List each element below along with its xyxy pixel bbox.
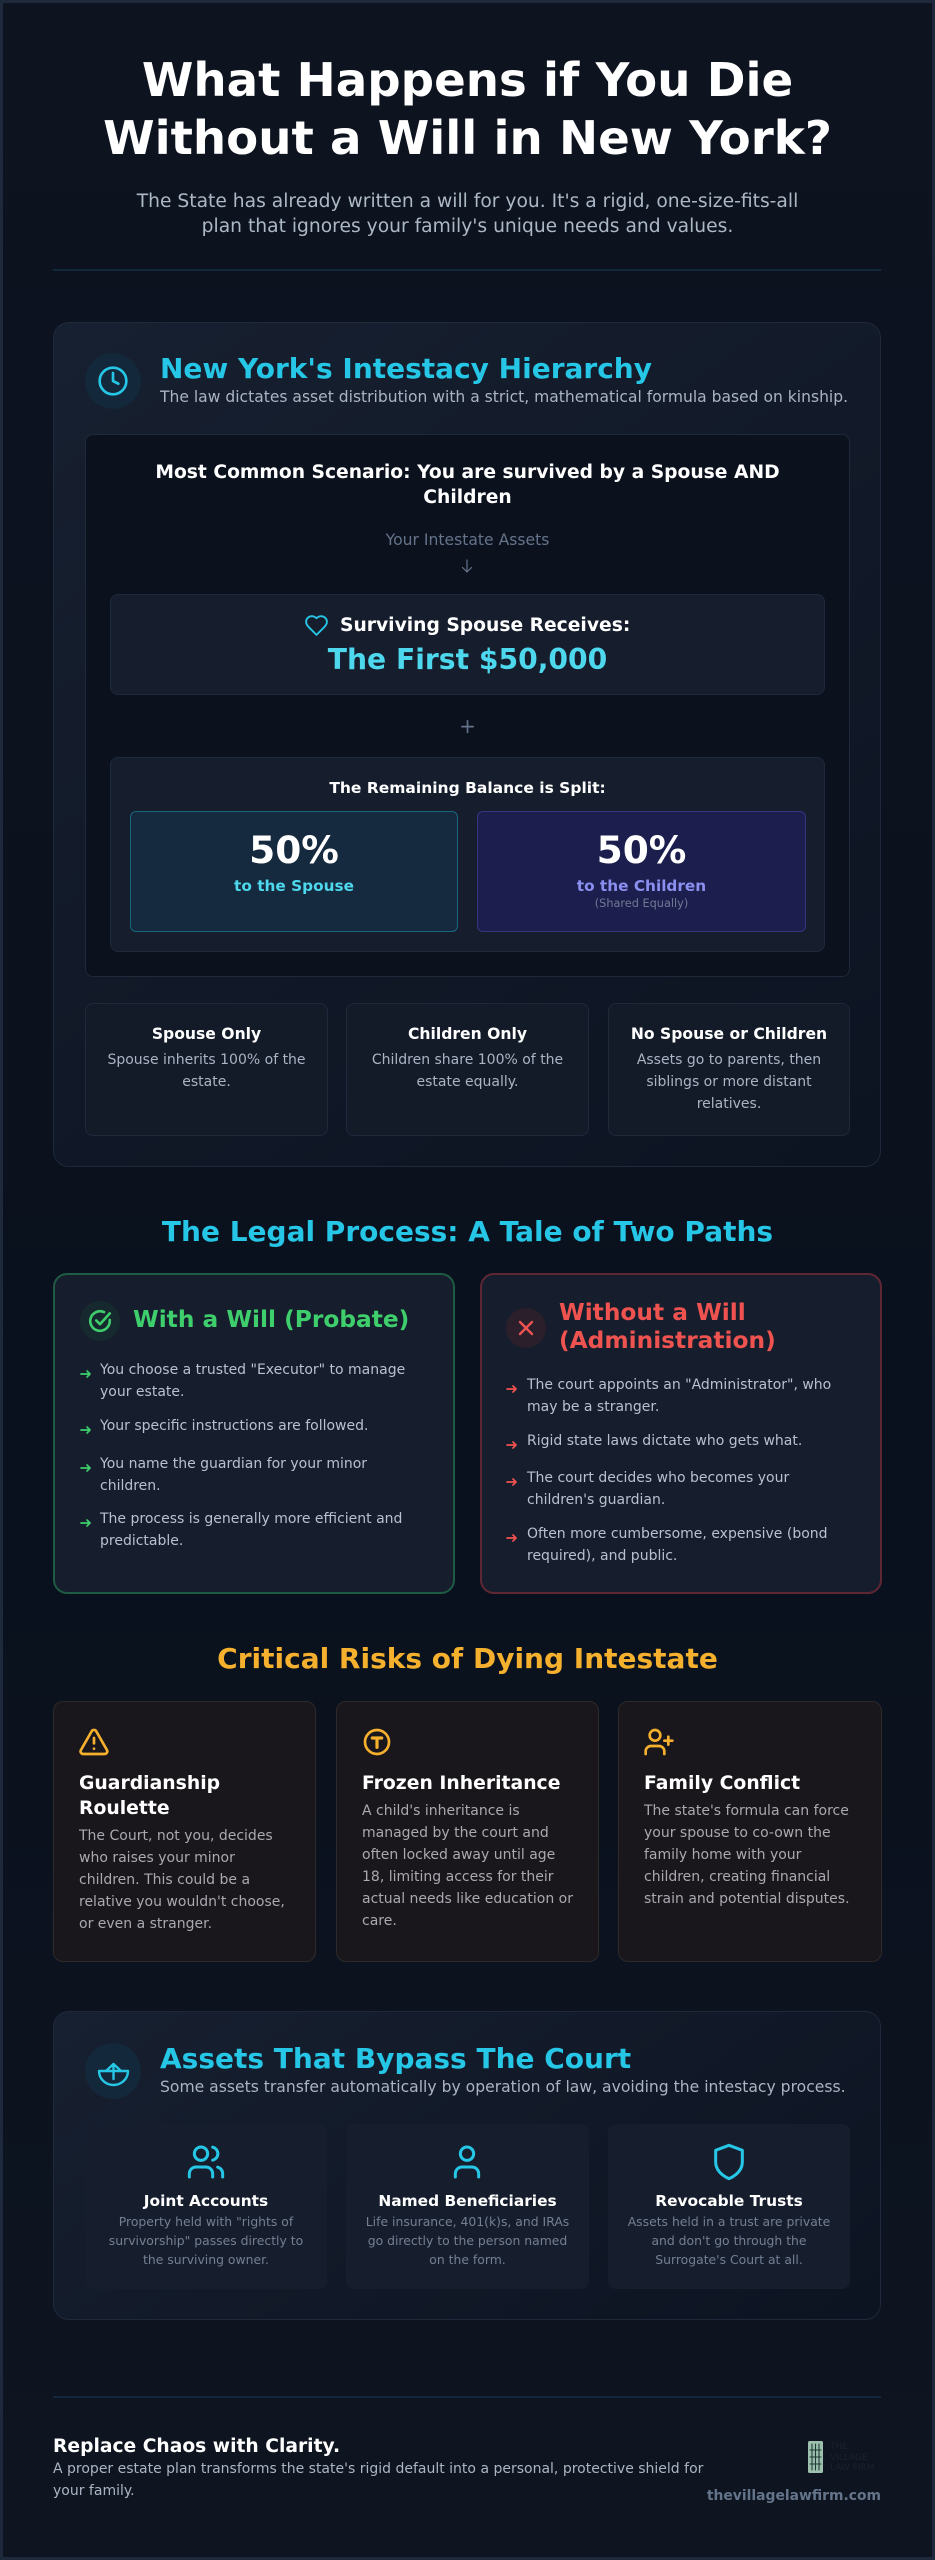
panel: intestacy hierarchy (53, 322, 881, 1167)
card: named beneficiaries: go directly to the person named (368, 2233, 567, 2248)
card: no spouse or children: Assets go to parents, then (637, 1052, 821, 1068)
website: thevillagelawfirm.com (707, 2488, 881, 2504)
card: joint accounts: Property held with "rights of (119, 2214, 293, 2229)
card: frozen inheritance (336, 1701, 599, 1962)
card: joint accounts: the surviving owner. (143, 2252, 269, 2267)
list: with a will (80, 1362, 405, 1549)
label: surviving spouse receives: Surviving Spouse Receives: (340, 615, 630, 636)
card: family conflict (618, 1701, 882, 1962)
card: named beneficiaries (346, 2124, 589, 2289)
share: spouse 50% (130, 811, 458, 932)
title (103, 54, 832, 166)
list: without a will: may be a stranger. (527, 1399, 659, 1415)
panel: with a will (53, 1273, 455, 1594)
text: family conflict: The state's formula can force (644, 1803, 849, 1819)
title: Without a Will in New York? (103, 112, 832, 166)
list: without a will: children's guardian. (527, 1492, 665, 1508)
list: without a will: The court appoints an "Administrator", who (527, 1377, 831, 1393)
text: guardianship roulette (78, 1828, 285, 1932)
share: children 50%: to the Children (577, 877, 706, 895)
footer: call to action (53, 2436, 704, 2499)
list: with a will: You name the guardian for your minor (100, 1456, 367, 1472)
icon: warning triangle (79, 1728, 109, 1756)
card: spouse only: Spouse inherits 100% of the (107, 1052, 306, 1068)
text: frozen inheritance (362, 1803, 573, 1929)
list: with a will: You choose a trusted "Executor" to manage (100, 1362, 405, 1378)
panel: spouse receives (110, 594, 825, 695)
share: spouse 50%: 50% (249, 828, 339, 872)
list: without a will: Rigid state laws dictate who gets what. (527, 1433, 802, 1449)
card: joint accounts: survivorship" passes directly to (109, 2233, 303, 2248)
card: revocable trusts: Revocable Trusts (655, 2192, 803, 2210)
text: guardianship roulette: children. This could be a (79, 1872, 250, 1888)
text: family conflict: strain and potential disputes. (644, 1891, 850, 1907)
card: joint accounts: Joint Accounts (144, 2192, 268, 2210)
heading: remaining balance: The Remaining Balance is Split: (329, 779, 606, 797)
card: children only (346, 1003, 589, 1136)
value: first 50,000: The First $50,000 (328, 643, 607, 676)
heading: scenario: Most Common Scenario: You are survived by a Spouse AND (155, 462, 780, 483)
icon: x mark (506, 1308, 546, 1348)
text: guardianship roulette: or even a stranger. (79, 1916, 212, 1932)
icon: check badge (80, 1301, 120, 1341)
list: with a will: your estate. (100, 1384, 184, 1400)
text: frozen inheritance: 18, limiting access for their (362, 1869, 554, 1885)
share: children 50%: 50% (597, 828, 686, 872)
card: joint accounts (85, 2124, 327, 2289)
panel: remaining balance (110, 757, 825, 952)
heading: assets bypass: Assets That Bypass The Court (160, 2042, 631, 2075)
card: children only: estate equally. (416, 1074, 518, 1090)
share: spouse 50%: to the Spouse (234, 877, 354, 895)
arrow: down (462, 559, 472, 573)
heading: without a will: Without a Will (559, 1299, 746, 1326)
text: intestacy intro: The law dictates asset distribution with a strict, mathematical formula based on kinship. (160, 388, 848, 406)
text: family conflict: children, creating financial (644, 1869, 830, 1885)
heading: legal process: The Legal Process: A Tale of Two Paths (162, 1215, 773, 1248)
list: with a will: children. (100, 1478, 161, 1494)
card: spouse only: Spouse Only (152, 1025, 261, 1043)
subtitle (136, 191, 798, 237)
logo: the village law firm: LAW FIRM (830, 2463, 874, 2473)
footer: call to action: your family. (53, 2483, 135, 2499)
heading: with a will: With a Will (Probate) (133, 1306, 409, 1333)
footer: call to action: A proper estate plan transforms the state's rigid default into a personal, protective shield for (53, 2461, 703, 2477)
card: no spouse or children (608, 1003, 850, 1136)
icon: clock (85, 353, 141, 409)
icon: heart (305, 615, 328, 636)
icon: coin (364, 1728, 390, 1756)
list: with a will: Your specific instructions are followed. (100, 1418, 368, 1434)
text: family conflict (644, 1803, 850, 1907)
heading: scenario (155, 462, 780, 508)
text: frozen inheritance: A child's inheritance is (362, 1803, 520, 1819)
card: spouse only (85, 1003, 328, 1136)
heading: without a will (559, 1299, 776, 1354)
text: frozen inheritance: often locked away until age (362, 1847, 555, 1863)
text: frozen inheritance: care. (362, 1913, 397, 1929)
list: without a will: The court decides who becomes your (527, 1470, 789, 1486)
heading: guardianship roulette: Guardianship (79, 1773, 220, 1794)
card: revocable trusts: Assets held in a trust are private (628, 2214, 830, 2229)
subtitle: plan that ignores your family's unique needs and values. (202, 216, 733, 237)
card: revocable trusts (608, 2124, 850, 2289)
text: guardianship roulette: who raises your minor (79, 1850, 235, 1866)
card: named beneficiaries: Life insurance, 401(k)s, and IRAs (366, 2214, 569, 2229)
card: no spouse or children: No Spouse or Children (631, 1025, 827, 1043)
footer: call to action: Replace Chaos with Clarity. (53, 2436, 340, 2457)
card: no spouse or children: siblings or more distant (646, 1074, 812, 1090)
icon: user plus (644, 1728, 674, 1756)
label: your intestate assets: Your Intestate Assets (386, 531, 549, 549)
text: assets intro: Some assets transfer automatically by operation of law, avoiding the intestacy process. (160, 2078, 846, 2096)
logo: the village law firm: THE (830, 2442, 848, 2452)
card: named beneficiaries: Named Beneficiaries (378, 2192, 557, 2210)
text: family conflict: your spouse to co-own the (644, 1825, 831, 1841)
heading: critical risks: Critical Risks of Dying Intestate (217, 1642, 718, 1675)
heading: without a will: (Administration) (559, 1327, 776, 1354)
card: children only: Children share 100% of the (372, 1052, 563, 1068)
text: family conflict: family home with your (644, 1847, 801, 1863)
logo: the village law firm (808, 2441, 874, 2473)
list: without a will: required), and public. (527, 1548, 677, 1564)
card: no spouse or children: relatives. (697, 1096, 761, 1112)
heading: family conflict: Family Conflict (644, 1773, 800, 1794)
heading: guardianship roulette (79, 1773, 220, 1819)
card: revocable trusts: Surrogate's Court at all. (655, 2252, 803, 2267)
logo: the village law firm: VILLAGE (830, 2452, 868, 2462)
text: frozen inheritance: managed by the court and (362, 1825, 549, 1841)
plus sign: + (459, 714, 476, 738)
card: guardianship roulette (53, 1701, 316, 1962)
panel: most common scenario (85, 434, 850, 977)
card: revocable trusts: and don't go through the (651, 2233, 807, 2248)
list: with a will: predictable. (100, 1533, 183, 1549)
heading: guardianship roulette: Roulette (79, 1798, 170, 1819)
text: guardianship roulette: relative you wouldn't choose, (79, 1894, 285, 1910)
list: without a will: Often more cumbersome, expensive (bond (527, 1526, 828, 1542)
panel: assets bypass (53, 2011, 881, 2320)
heading: intestacy hierarchy: New York's Intestacy Hierarchy (160, 352, 652, 385)
text: frozen inheritance: actual needs like education or (362, 1891, 573, 1907)
card: spouse only: estate. (182, 1074, 231, 1090)
heading: scenario: Children (423, 487, 512, 508)
list: without a will (506, 1377, 831, 1564)
panel: without a will (480, 1273, 882, 1594)
card: children only: Children Only (408, 1025, 527, 1043)
subtitle: The State has already written a will for you. It's a rigid, one-size-fits-all (137, 191, 798, 212)
list: with a will: The process is generally more efficient and (100, 1511, 402, 1527)
text: guardianship roulette: The Court, not you, decides (79, 1828, 273, 1844)
title: What Happens if You Die (142, 54, 793, 108)
share: children 50%: (Shared Equally) (595, 897, 688, 910)
icon: umbrella bowl (85, 2043, 141, 2099)
share: children 50% (477, 811, 806, 932)
heading: frozen inheritance: Frozen Inheritance (362, 1773, 560, 1794)
card: named beneficiaries: on the form. (429, 2252, 506, 2267)
